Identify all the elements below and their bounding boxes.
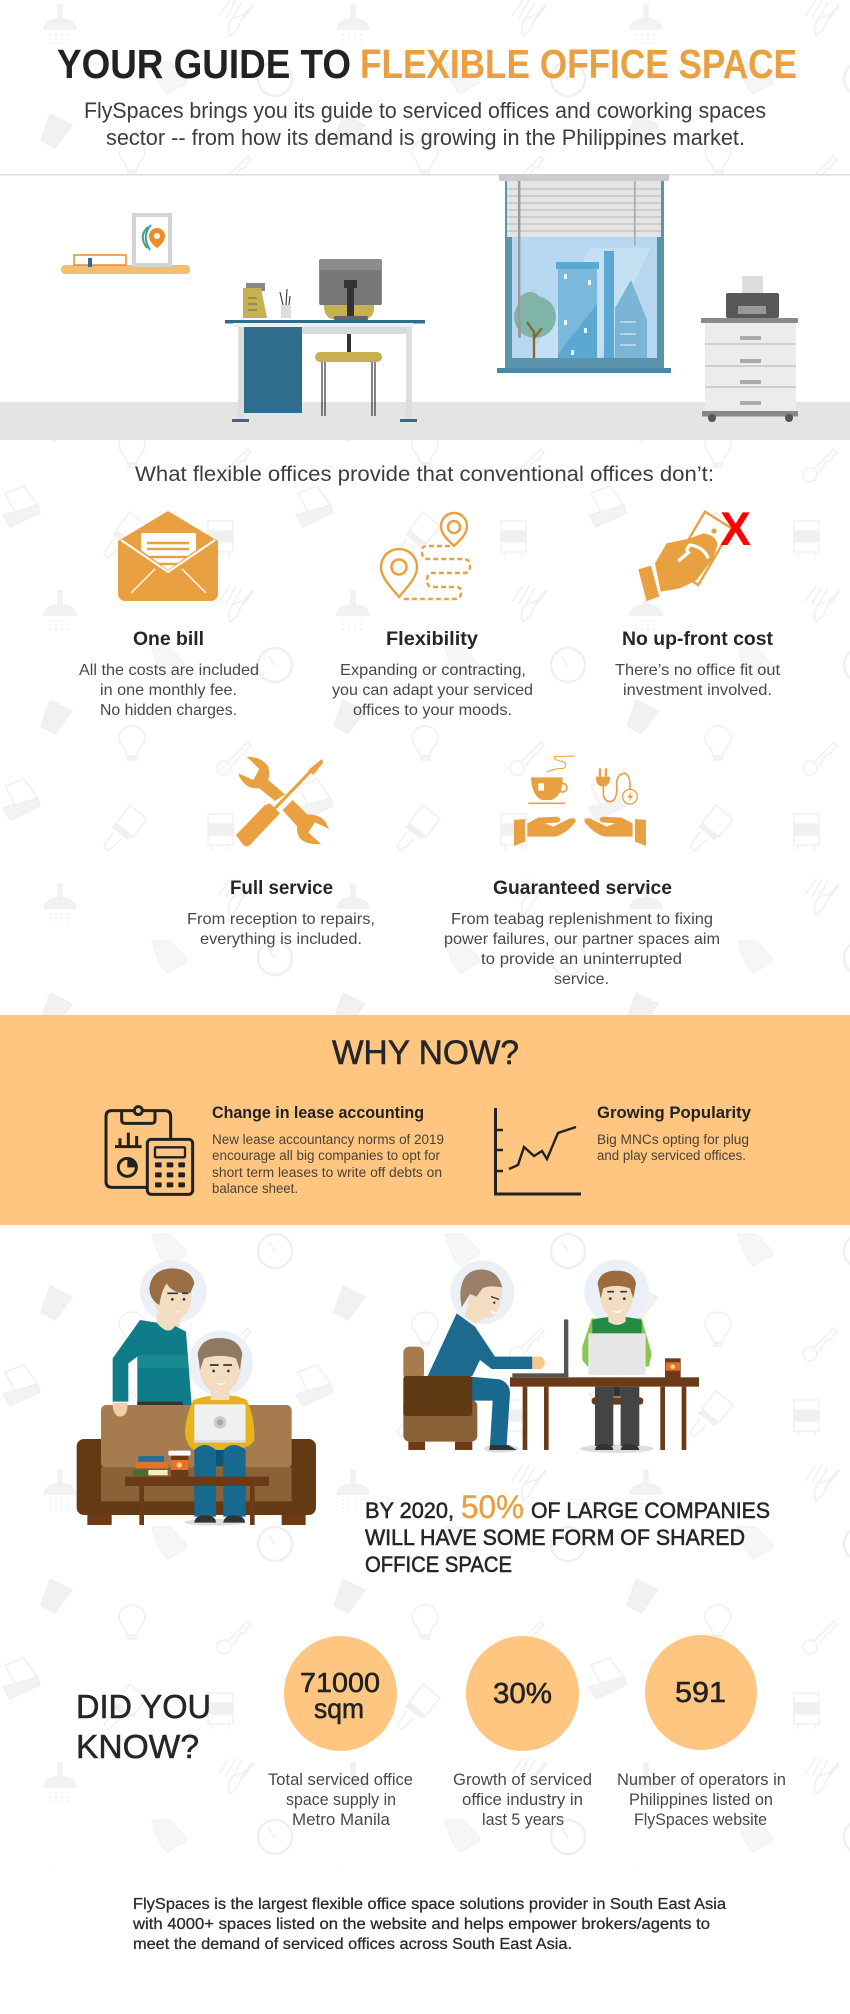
description [444,911,720,988]
description [332,662,533,719]
heading: did you know [76,1688,211,1765]
office illustration [0,174,850,440]
footer text: FlySpaces is the largest flexible office space solutions provider in South East Asia [133,1896,726,1913]
text: change in lease accounting [212,1103,444,1196]
stat: 71000 sqm [268,1636,413,1829]
footer text: meet the demand of serviced offices across South East Asia. [133,1936,572,1953]
description: to provide an uninterrupted [481,951,682,968]
title [57,41,797,87]
printer [726,276,779,318]
description: everything is included. [200,931,362,948]
description: you can adapt your serviced [332,682,533,699]
text: change in lease accounting: Change in lease accounting [212,1103,424,1122]
blinds [507,180,661,338]
text: growing popularity: Growing Popularity [597,1103,752,1122]
laptop side view [512,1319,568,1377]
description [615,662,781,699]
stat: 30% growth: Growth of serviced [453,1771,592,1789]
standing man [113,1268,194,1417]
sofa [77,1405,316,1525]
coffee cup [168,1451,191,1477]
footer text: with 4000+ spaces listed on the website and helps empower brokers/agents to [132,1916,710,1933]
footer text [132,1896,726,1953]
heading: what flexible offices provide: What flexible offices provide that conventional offices don’t: [135,462,714,486]
statistic: 50% of large companies: OF LARGE COMPANIES [531,1498,770,1523]
heading: did you know: KNOW? [76,1728,199,1765]
statistic: 50% of large companies: OFFICE SPACE [365,1552,512,1577]
desk [510,1377,699,1450]
intro text: sector -- from how its demand is growing in the Philippines market. [106,125,745,150]
heading: Guaranteed service [493,878,672,899]
description: All the costs are included [79,662,259,679]
description: Expanding or contracting, [340,662,526,679]
text: growing popularity: and play serviced offices. [597,1148,746,1163]
text: growing popularity [597,1103,752,1163]
title: YOUR GUIDE TO [57,41,351,87]
desk organiser and pens [243,283,291,318]
description: in one monthly fee. [100,682,237,699]
stat: 591 operators: 591 [675,1677,726,1709]
man in profile [403,1269,545,1416]
description: power failures, our partner spaces aim [444,931,720,948]
icon: rising line chart [496,1108,581,1194]
text: change in lease accounting: short term leases to write off debts on [212,1165,442,1180]
man facing front [580,1271,653,1453]
statistic: 50% of large companies: 50% [461,1489,524,1525]
text: growing popularity: Big MNCs opting for plug [597,1132,749,1147]
panel: no up-front cost [615,502,781,699]
books [132,1456,168,1476]
description [79,662,259,719]
stat: 591 operators: Philippines listed on [629,1791,773,1809]
text: change in lease accounting: balance sheet. [212,1181,298,1196]
heading: No up-front cost [622,629,774,650]
stat: 71000 sqm: Metro Manila [292,1811,391,1829]
description [187,911,375,948]
icon: envelope [118,511,218,601]
stat: 30% growth [453,1636,592,1829]
floor [0,402,850,440]
coffee cup [665,1358,681,1378]
stat: 591 operators: FlySpaces website [634,1811,767,1829]
panel: flexibility [332,513,533,719]
statistic: 50% of large companies [365,1489,770,1577]
statistic: 50% of large companies: BY 2020, [365,1498,454,1523]
description: There’s no office fit out [615,662,781,679]
seated man with laptop [184,1338,254,1526]
icon: tea, plug and hands [514,756,646,846]
stat: 30% growth: office industry in [462,1791,583,1809]
heading: Flexibility [386,629,478,650]
heading: One bill [133,629,204,650]
stat: 30% growth: 30% [493,1678,552,1710]
description: No hidden charges. [100,702,237,719]
icon: wrench and screwdriver [236,757,329,846]
monitor [319,259,382,320]
intro text [84,98,766,150]
icon: hand with banknote crossed out [638,502,751,601]
description: From teabag replenishment to fixing [451,911,713,928]
chair and leg of man in profile [403,1347,518,1453]
heading: Full service [230,878,333,899]
window [497,174,671,373]
heading: did you know: DID YOU [76,1688,211,1725]
description: service. [554,971,609,988]
illustration: two men on sofa [77,1260,316,1526]
description: From reception to repairs, [187,911,375,928]
icon: hand with banknote crossed out: X [720,502,751,555]
desk [225,320,425,422]
icon: map pins route [381,513,470,599]
panel: why now [0,1015,850,1225]
description: investment involved. [623,682,772,699]
coffee table [125,1477,269,1525]
icon: clipboard and calculator [106,1107,193,1194]
city view [514,251,647,358]
heading: WHY NOW? [332,1034,519,1072]
text: change in lease accounting: encourage all big companies to opt for [212,1148,440,1163]
statistic: 50% of large companies: WILL HAVE SOME FORM OF SHARED [365,1525,745,1550]
description: offices to your moods. [353,702,512,719]
stat: 591 operators [617,1635,786,1829]
stat: 71000 sqm: space supply in [286,1791,396,1809]
stool [315,334,382,416]
stat: 591 operators: Number of operators in [617,1771,786,1789]
panel: guaranteed service [444,756,720,988]
stat: 71000 sqm: sqm [314,1693,364,1724]
illustration: two men at a desk [403,1260,699,1453]
panel: full service [187,757,375,948]
stat: 30% growth: last 5 years [482,1811,564,1829]
text: change in lease accounting: New lease accountancy norms of 2019 [212,1132,444,1147]
panel: one bill [79,511,259,719]
drawer cabinet [701,318,798,422]
wall shelf with frame [61,215,190,274]
stat: 71000 sqm: Total serviced office [268,1771,413,1789]
stat: 71000 sqm: 71000 [300,1667,380,1698]
intro text: FlySpaces brings you its guide to serviced offices and coworking spaces [84,98,766,123]
